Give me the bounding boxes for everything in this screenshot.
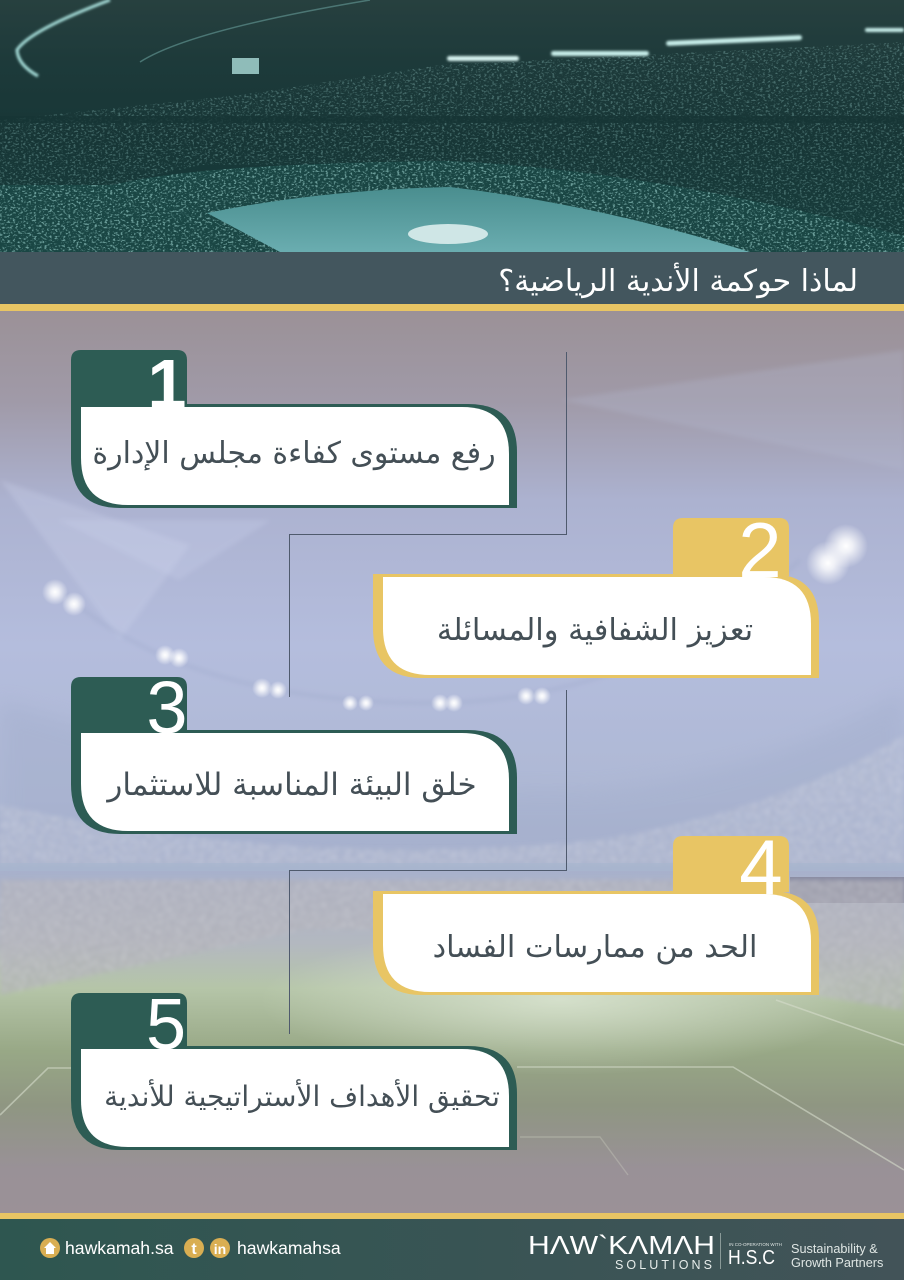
logo: Hawkamah Solutions: SOLUTIONS <box>615 1258 712 1272</box>
number 4: 4 <box>739 823 783 911</box>
title band <box>0 252 904 304</box>
label 1: رفع مستوى كفاءة مجلس الإدارة <box>92 436 496 471</box>
logo: H.S.C: H.S.C <box>728 1247 775 1269</box>
gold header rule <box>0 304 904 311</box>
connector lines between steps <box>290 352 566 1034</box>
logo: Hawkamah Solutions: HΛW`KΛMΛH <box>528 1230 715 1260</box>
step 3 card <box>71 666 517 834</box>
logo: Hawkamah Solutions <box>528 1230 715 1272</box>
label 3: خلق البيئة المناسبة للاستثمار <box>105 767 477 803</box>
icon: linkedin <box>210 1238 230 1258</box>
label 2: تعزيز الشفافية والمسائلة <box>437 613 753 648</box>
footer band <box>0 1219 904 1280</box>
number 3: 3 <box>146 666 188 749</box>
icon: linkedin: in <box>214 1241 226 1257</box>
gold footer rule <box>0 1213 904 1219</box>
social handle text: hawkamahsa <box>237 1238 341 1258</box>
logo divider <box>720 1233 721 1269</box>
icon: twitter: t <box>191 1241 197 1258</box>
number 5: 5 <box>146 985 186 1065</box>
tagline: Growth Partners <box>791 1256 883 1270</box>
header photo: stadium at night <box>0 0 904 252</box>
icon: home <box>40 1238 60 1258</box>
title: لماذا حوكمة الأندية الرياضية؟ <box>498 261 858 299</box>
label 5: تحقيق الأهداف الأستراتيجية للأندية <box>104 1078 500 1113</box>
icon: twitter <box>184 1238 204 1258</box>
pitch <box>207 187 750 252</box>
label 4: الحد من ممارسات الفساد <box>433 930 757 965</box>
number 1: 1 <box>148 345 186 423</box>
step 5 card <box>71 985 517 1150</box>
step 4 card <box>373 823 819 995</box>
logo: H.S.C: IN CO-OPERATION WITH <box>729 1242 782 1247</box>
number 2: 2 <box>738 506 782 594</box>
step 1 card <box>71 345 517 508</box>
website text: hawkamah.sa <box>65 1238 174 1258</box>
stadium roof edge <box>60 560 800 703</box>
tagline: Sustainability & <box>791 1242 878 1256</box>
step 2 card <box>373 506 819 678</box>
main background: stadium under floodlights <box>0 311 904 1214</box>
